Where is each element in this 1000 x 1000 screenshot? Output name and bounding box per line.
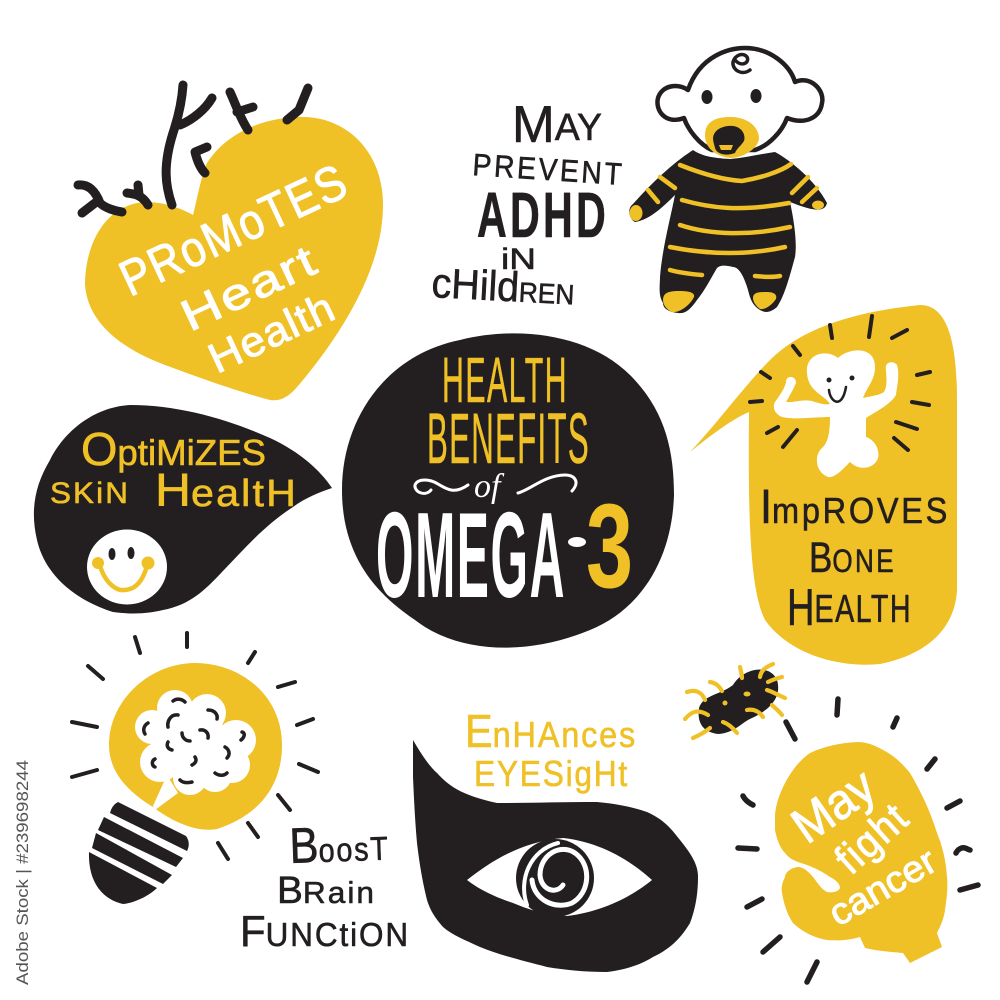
brain text: BoosT: [288, 815, 390, 874]
glove text: fight: [826, 793, 918, 883]
icon: smiley: [87, 530, 167, 604]
panel: bone health: [690, 305, 957, 665]
skin text: HealtH: [155, 464, 298, 516]
heart text: PRoMoTES: [111, 153, 357, 307]
panel: ADHD text: cHildREN: [431, 259, 576, 313]
icon: brain: [135, 690, 256, 810]
title text: BENEFITS: [427, 400, 590, 479]
baby pacifier: [705, 117, 759, 158]
icon: heart arteries: [78, 85, 308, 213]
brain text: FUNCtiON: [240, 907, 410, 956]
glove text: [781, 758, 943, 934]
baby suit: [629, 150, 827, 313]
panel: brain function: [72, 633, 410, 956]
bone speech bubble: [690, 305, 957, 665]
panel: ADHD text: AY: [555, 107, 602, 149]
title background: [342, 333, 674, 648]
panel: skin health: [34, 405, 332, 613]
eye text: [465, 705, 637, 794]
panel: ADHD text: ADHD: [477, 179, 609, 251]
skin text: [50, 423, 298, 516]
panel: ADHD text: iN: [501, 243, 536, 276]
title text: [376, 344, 633, 623]
panel: heart health: [78, 85, 383, 400]
panel: cancer: [685, 664, 978, 982]
skin speech bubble: [34, 405, 332, 613]
brain text: [240, 815, 410, 956]
eye speech bubble: [413, 740, 698, 972]
panel: eyesight: [413, 705, 698, 972]
bone rays: [750, 316, 930, 450]
title text: of: [474, 468, 505, 505]
heart text: Health: [201, 283, 342, 382]
title flourish: [415, 475, 576, 493]
baby hair curl: [733, 55, 750, 72]
brain text: BRain: [277, 870, 376, 912]
icon: happy bone: [774, 350, 898, 477]
panel: ADHD text: M: [512, 96, 555, 154]
panel: ADHD text: [431, 96, 626, 313]
icon: baby: [629, 48, 827, 313]
icon: heart: [85, 117, 383, 400]
skin text: OptiMiZES: [81, 423, 266, 475]
baby stripes: [648, 164, 817, 277]
baby head: [657, 48, 822, 150]
bone text: BONE: [809, 534, 896, 582]
icon: boxing glove: [775, 742, 947, 963]
glove rays: [738, 699, 978, 982]
icon: germ: [685, 664, 785, 738]
eye text: EnHAnces: [465, 705, 637, 757]
glove text: May: [781, 758, 885, 854]
bone text: H: [787, 579, 825, 637]
title text: 3: [586, 479, 633, 613]
panel: ADHD text: PREVENT: [472, 147, 626, 192]
glove text: cancer: [822, 840, 943, 934]
skin text: SKiN: [50, 477, 130, 510]
title text: HEALTH: [442, 344, 568, 416]
panel: title blob: [342, 333, 674, 648]
icon: bulb base: [89, 802, 189, 904]
bone text: ImpROVES: [760, 481, 950, 534]
baby eyes: [702, 90, 712, 104]
bulb rays: [72, 633, 318, 859]
icon: bulb glass: [109, 663, 282, 830]
stock credit: Adobe Stock | #239698244: [13, 760, 32, 985]
icon: eye: [467, 838, 652, 917]
heart text: [111, 153, 357, 382]
bone text: EALTH: [815, 588, 912, 631]
title text: OMEGA: [376, 487, 566, 623]
heart text: Heart: [174, 235, 326, 341]
baby hands and feet: [630, 200, 824, 312]
bone text: [760, 481, 950, 637]
eye text: EYESigHt: [474, 753, 629, 794]
